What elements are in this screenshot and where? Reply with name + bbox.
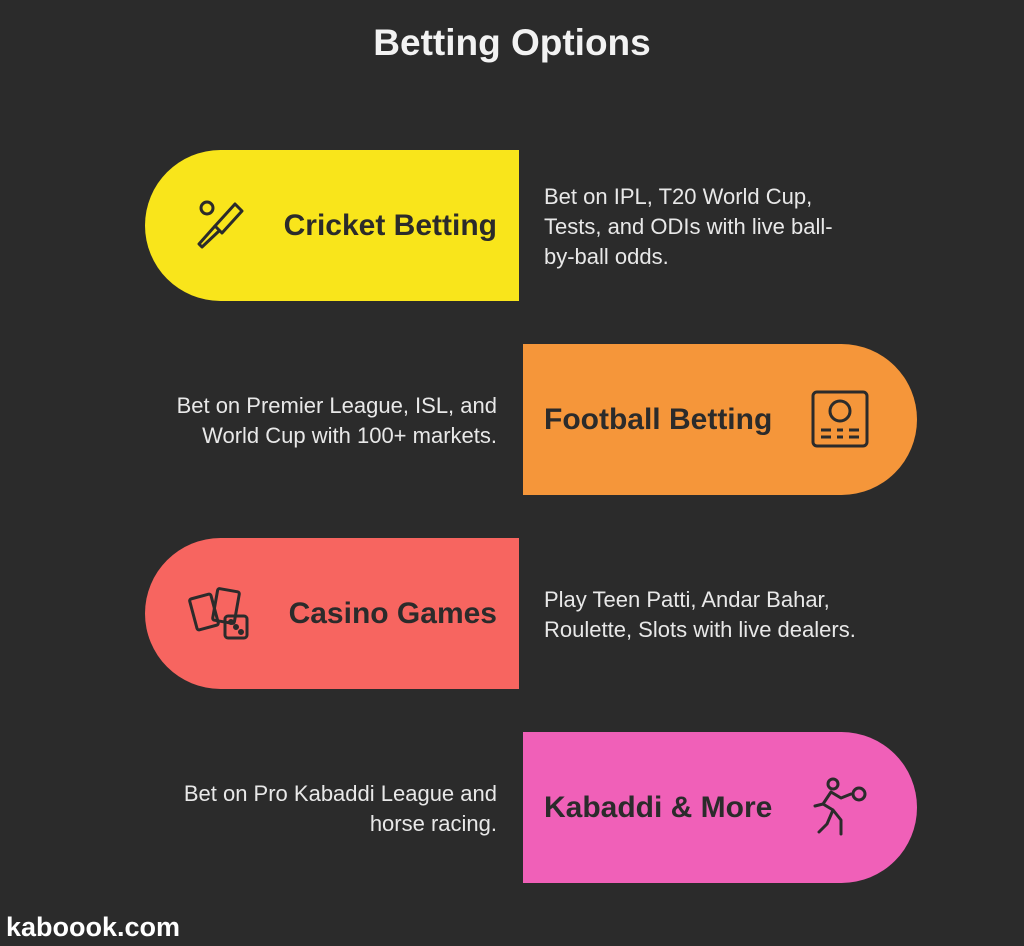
panel: football <box>523 344 917 495</box>
label: Football Betting <box>544 403 772 436</box>
text: casino: Roulette, Slots with live dealers. <box>544 617 856 642</box>
icon: cards and dice <box>188 587 248 640</box>
text: cricket: by-ball odds. <box>544 244 669 269</box>
icon: football screen <box>812 390 868 448</box>
title: Betting Options <box>373 22 651 63</box>
text: football: World Cup with 100+ markets. <box>202 423 497 448</box>
text: kabaddi: horse racing. <box>370 811 497 836</box>
text: kabaddi: Bet on Pro Kabaddi League and <box>184 781 497 806</box>
label: Cricket Betting <box>284 209 497 242</box>
panel: kabaddi <box>523 732 917 883</box>
label: Casino Games <box>289 597 497 630</box>
icon: cricket bat <box>197 200 244 249</box>
text: casino <box>544 587 856 642</box>
text: kabaddi <box>184 781 497 836</box>
label: Kabaddi & More <box>544 791 772 824</box>
text: cricket <box>544 184 833 269</box>
footer: kaboook.com <box>6 912 180 942</box>
icon: player <box>814 778 866 836</box>
text: football <box>177 393 497 448</box>
text: cricket: Tests, and ODIs with live ball- <box>544 214 833 239</box>
text: football: Bet on Premier League, ISL, and <box>177 393 497 418</box>
text: casino: Play Teen Patti, Andar Bahar, <box>544 587 830 612</box>
text: cricket: Bet on IPL, T20 World Cup, <box>544 184 812 209</box>
panel: cricket <box>145 150 519 301</box>
panel: casino <box>145 538 519 689</box>
